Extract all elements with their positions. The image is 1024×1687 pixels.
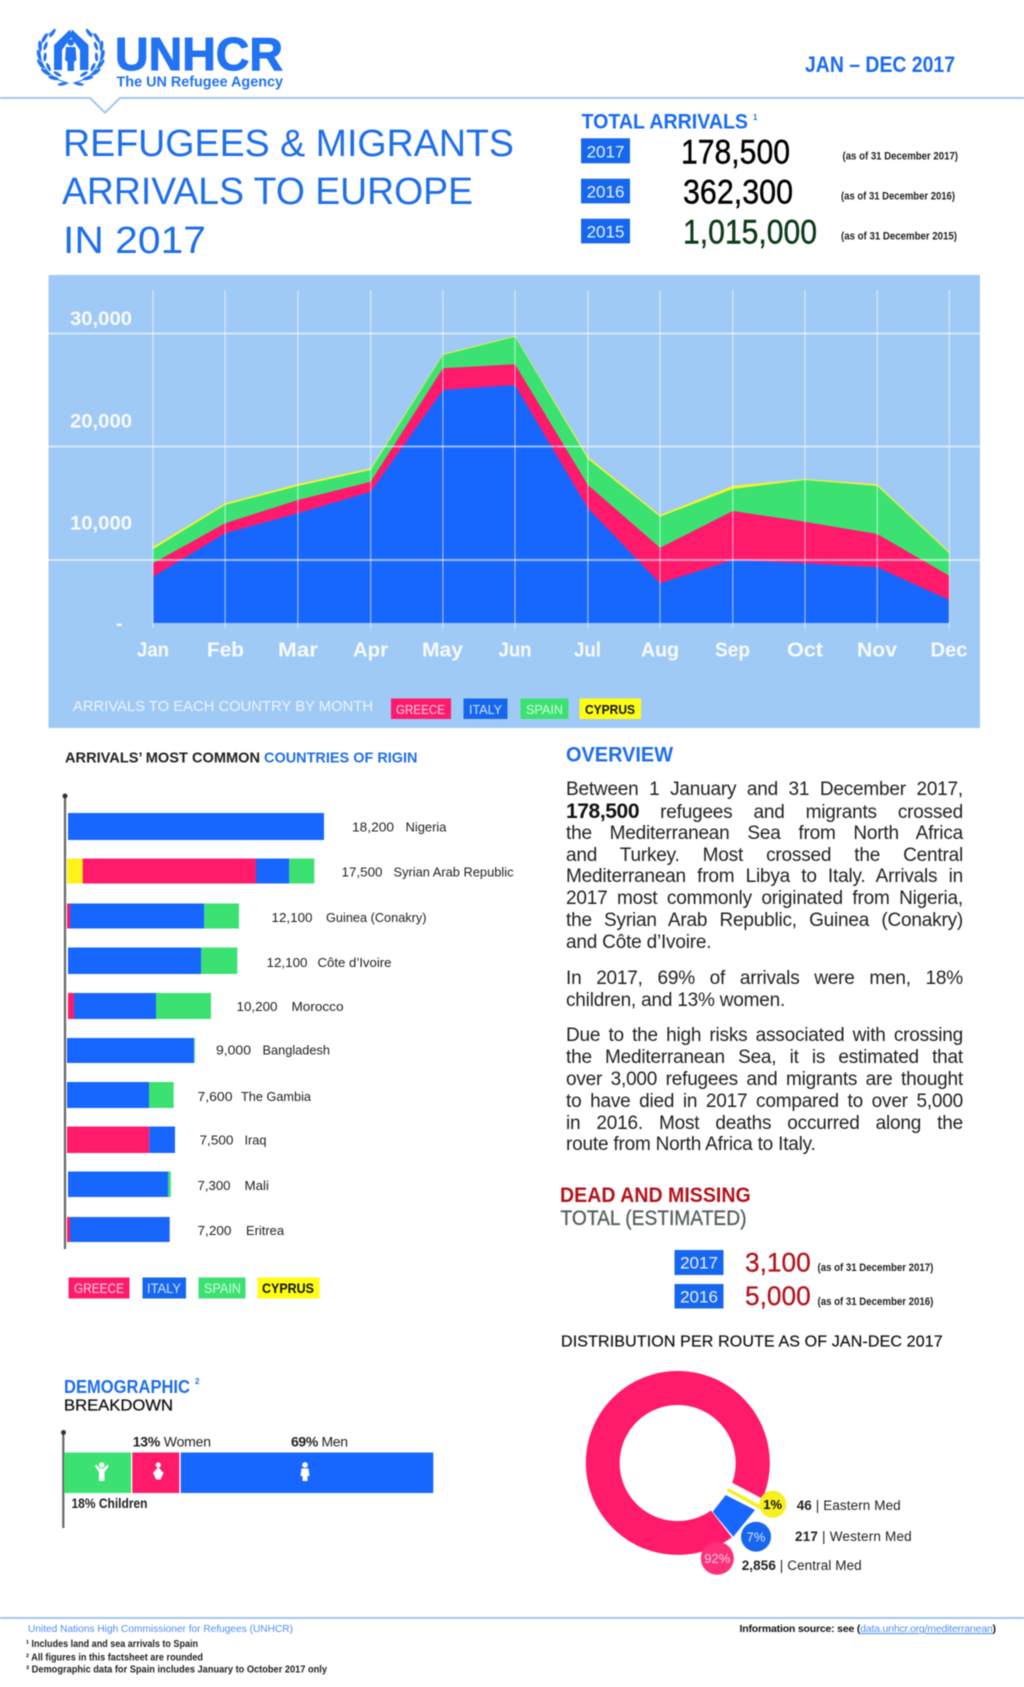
footer: source: Information source: see (data.unhcr.org/mediterranean) bbox=[740, 1623, 996, 1635]
row: 2016 bbox=[581, 173, 955, 211]
label: central med: 92% bbox=[704, 1551, 731, 1566]
bar: Syrian Arab Republic bbox=[67, 858, 514, 884]
y axis labels: - bbox=[116, 613, 122, 635]
heading: overview: OVERVIEW bbox=[566, 744, 673, 766]
segment: men: 69% Men bbox=[291, 1434, 348, 1450]
x axis labels: Apr bbox=[353, 640, 388, 662]
segment: central med bbox=[586, 1371, 770, 1555]
segment: children bbox=[64, 1452, 148, 1511]
bar: Morocco: 10,200 bbox=[236, 999, 278, 1014]
row: 2016 deaths: 5,000 bbox=[745, 1281, 811, 1311]
bar: Guinea (Conakry): 12,100 bbox=[272, 910, 312, 925]
bar: Nigeria: 18,200 bbox=[352, 820, 394, 834]
x axis labels: Jun bbox=[498, 640, 532, 662]
text block: overview: over 3,000 refugees and migrants are thought bbox=[566, 1069, 963, 1090]
y axis labels bbox=[70, 308, 132, 635]
bar: Iraq bbox=[67, 1126, 266, 1153]
heading: breakdown: BREAKDOWN bbox=[64, 1398, 173, 1414]
text block: overview: Due to the high risks associated with crossing bbox=[566, 1025, 963, 1046]
text block: overview: children, and 13% women. bbox=[566, 990, 785, 1011]
logo: UNHCR bbox=[36, 28, 284, 90]
heading: demographic: DEMOGRAPHIC bbox=[64, 1377, 190, 1397]
footnotes bbox=[26, 1638, 327, 1676]
text block: overview: Mediterranean from Libya to Italy. Arrivals in bbox=[566, 866, 963, 887]
bar: Morocco: Morocco bbox=[292, 999, 344, 1014]
icon: wreath and sheltering hands bbox=[36, 28, 106, 86]
bar chart: countries of origin bbox=[62, 794, 514, 1249]
x axis labels: Oct bbox=[787, 640, 823, 662]
text block: overview: in 2016. Most deaths occurred along the bbox=[566, 1113, 963, 1134]
bar: The Gambia: The Gambia bbox=[241, 1089, 312, 1104]
heading: dead and missing: DEAD AND MISSING bbox=[560, 1184, 751, 1207]
row: 2017 bbox=[581, 133, 958, 171]
footnotes: ³ Demographic data for Spain includes January to October 2017 only bbox=[26, 1664, 327, 1676]
y axis labels: 20,000 bbox=[70, 410, 132, 432]
text block: overview: In 2017, 69% of arrivals were men, 18% bbox=[566, 968, 963, 989]
bar: Bangladesh: Bangladesh bbox=[262, 1042, 330, 1058]
text block: overview: the Mediterranean Sea from North Africa bbox=[566, 823, 963, 844]
row: 2016 deaths: 2016 bbox=[680, 1288, 718, 1306]
text block: overview: to have died in 2017 compared to over 5,000 bbox=[566, 1091, 963, 1112]
area: cyprus bbox=[153, 336, 949, 623]
legend: chart: ITALY bbox=[469, 702, 502, 717]
segment: children: 18% Children bbox=[72, 1495, 148, 1511]
bar: Côte d'Ivoire: 12,100 bbox=[266, 955, 308, 970]
title bbox=[62, 123, 514, 262]
text block: overview bbox=[566, 779, 964, 1155]
bar: Nigeria: Nigeria bbox=[406, 820, 447, 834]
row: 2017 deaths: (as of 31 December 2017) bbox=[818, 1262, 934, 1274]
bar: Côte d'Ivoire: Côte d’Ivoire bbox=[318, 955, 392, 970]
x axis labels: Dec bbox=[930, 640, 968, 662]
legend: chart: CYPRUS bbox=[585, 702, 635, 717]
y axis labels: 10,000 bbox=[70, 512, 132, 534]
subheading: total estimated: TOTAL (ESTIMATED) bbox=[560, 1207, 746, 1230]
legend: chart bbox=[391, 698, 641, 719]
label: eastern med: 46 | Eastern Med bbox=[797, 1498, 901, 1513]
panel: dead and missing bbox=[560, 1184, 934, 1311]
label: western med: 217 | Western Med bbox=[795, 1529, 912, 1544]
row: 2016: 362,300 bbox=[683, 173, 793, 211]
x axis labels: Nov bbox=[857, 640, 898, 662]
text block: overview: the Mediterranean Sea, it is estimated that bbox=[566, 1047, 963, 1068]
panel: monthly arrivals chart bbox=[48, 275, 980, 728]
row: 2017 deaths: 2017 bbox=[680, 1254, 718, 1272]
row: 2016: (as of 31 December 2016) bbox=[841, 190, 955, 202]
bar: Iraq: 7,500 bbox=[200, 1132, 234, 1148]
bar: The Gambia: 7,600 bbox=[198, 1089, 232, 1104]
bar: The Gambia bbox=[67, 1082, 312, 1108]
icon: woman bbox=[153, 1462, 164, 1480]
text block: overview: route from North Africa to Italy. bbox=[566, 1134, 816, 1155]
row: 2016 deaths: (as of 31 December 2016) bbox=[818, 1296, 934, 1308]
row: 2017 deaths bbox=[674, 1248, 934, 1278]
x axis labels: Sep bbox=[715, 640, 750, 662]
x axis labels: Feb bbox=[207, 640, 244, 662]
panel: demographic breakdown bbox=[61, 1377, 433, 1528]
text block: overview: 2017 most commonly originated from Nigeria, bbox=[566, 888, 963, 909]
heading: countries of origin: COUNTRIES OF RIGIN bbox=[264, 750, 418, 766]
row: 2016 deaths bbox=[674, 1281, 934, 1311]
label: western med: 7% bbox=[747, 1530, 766, 1544]
bar: Mali bbox=[68, 1172, 269, 1197]
legend: countries chart: ITALY bbox=[147, 1280, 182, 1296]
text block: overview: Between 1 January and 31 December 2017, bbox=[566, 779, 963, 800]
label: western med bbox=[741, 1522, 912, 1552]
label: central med: 2,856 | Central Med bbox=[742, 1558, 862, 1573]
bar: Morocco bbox=[68, 993, 344, 1019]
logo wordmark: UNHCR bbox=[115, 28, 283, 80]
area: spain bbox=[153, 337, 949, 623]
heading: total arrivals: TOTAL ARRIVALS bbox=[582, 110, 748, 134]
heading: distribution per route: DISTRIBUTION PER ROUTE AS OF JAN-DEC 2017 bbox=[561, 1334, 943, 1350]
bar: Mali: Mali bbox=[244, 1178, 269, 1193]
x axis labels: Jan bbox=[137, 640, 169, 662]
heading: countries of origin bbox=[65, 750, 418, 766]
bar: Nigeria bbox=[68, 813, 447, 840]
footnotes: ¹ Includes land and sea arrivals to Spain bbox=[26, 1638, 198, 1650]
legend: countries chart: GREECE bbox=[74, 1280, 124, 1296]
bar: Eritrea: 7,200 bbox=[198, 1223, 232, 1238]
label: eastern med bbox=[759, 1491, 901, 1518]
x axis labels: Jul bbox=[574, 640, 601, 662]
text block: overview: and Côte d’Ivoire. bbox=[566, 932, 711, 953]
text block: overview: 178,500 refugees and migrants crossed bbox=[566, 800, 963, 823]
chart caption: ARRIVALS TO EACH COUNTRY BY MONTH bbox=[73, 698, 373, 715]
text block: overview: and Turkey. Most crossed the Central bbox=[566, 845, 963, 866]
row: 2015: 1,015,000 bbox=[683, 213, 817, 251]
row: 2016: 2016 bbox=[587, 182, 624, 202]
heading: countries of origin: ARRIVALS’ MOST COMMON bbox=[65, 750, 260, 766]
row: 2017: (as of 31 December 2017) bbox=[842, 150, 958, 162]
icon: child bbox=[95, 1462, 108, 1481]
bar: Côte d'Ivoire bbox=[68, 948, 392, 974]
legend: chart: GREECE bbox=[396, 702, 445, 717]
footnote marker: 2 bbox=[195, 1377, 200, 1386]
title: REFUGEES & MIGRANTS bbox=[63, 123, 514, 165]
label: central med bbox=[701, 1542, 862, 1575]
row: 2015: 2015 bbox=[587, 222, 624, 242]
bar: Guinea (Conakry): Guinea (Conakry) bbox=[326, 910, 426, 925]
x axis labels: Aug bbox=[641, 640, 679, 662]
header rule with notch bbox=[0, 98, 1024, 113]
bar: Iraq: Iraq bbox=[244, 1132, 266, 1148]
bar: Syrian Arab Republic: Syrian Arab Republic bbox=[394, 864, 514, 880]
legend: countries chart bbox=[68, 1278, 320, 1298]
panel: total arrivals bbox=[581, 110, 958, 251]
bar: Guinea (Conakry) bbox=[67, 904, 426, 928]
row: 2017: 2017 bbox=[587, 142, 624, 161]
legend: countries chart: CYPRUS bbox=[262, 1280, 314, 1296]
x axis labels: Mar bbox=[278, 640, 318, 662]
footer bbox=[0, 1618, 1024, 1676]
area: italy bbox=[153, 385, 949, 623]
footer: organisation: United Nations High Commissioner for Refugees (UNHCR) bbox=[28, 1623, 293, 1635]
bar: Bangladesh bbox=[67, 1038, 330, 1063]
segment: eastern med bbox=[727, 1488, 762, 1510]
label: eastern med: 1% bbox=[763, 1497, 783, 1512]
legend: chart: SPAIN bbox=[526, 702, 563, 717]
legend: countries chart: SPAIN bbox=[204, 1280, 241, 1296]
icon: man bbox=[300, 1462, 310, 1481]
date range: JAN – DEC 2017 bbox=[805, 52, 955, 77]
area: greece bbox=[153, 364, 949, 623]
text block: overview: the Syrian Arab Republic, Guinea (Conakry) bbox=[566, 910, 963, 931]
bar: Bangladesh: 9,000 bbox=[216, 1042, 251, 1058]
footnotes: ² All figures in this factsheet are rounded bbox=[26, 1652, 203, 1664]
row: 2017 deaths: 3,100 bbox=[745, 1248, 811, 1278]
bar: Eritrea: Eritrea bbox=[246, 1223, 285, 1238]
bar: Syrian Arab Republic: 17,500 bbox=[342, 864, 382, 880]
segment: men bbox=[181, 1434, 433, 1493]
y axis labels: 30,000 bbox=[70, 308, 132, 330]
x axis labels bbox=[137, 640, 968, 662]
row: 2015: (as of 31 December 2015) bbox=[841, 230, 957, 242]
bar: Eritrea bbox=[67, 1217, 285, 1242]
row: 2015 bbox=[581, 213, 957, 251]
footnote marker: 1 bbox=[753, 113, 758, 122]
logo tagline: The UN Refugee Agency bbox=[116, 74, 284, 90]
donut chart: routes bbox=[586, 1371, 912, 1575]
title: IN 2017 bbox=[63, 220, 206, 262]
segment: women bbox=[132, 1434, 211, 1493]
title: ARRIVALS TO EUROPE bbox=[62, 171, 473, 213]
segment: western med bbox=[713, 1495, 755, 1537]
bar: Mali: 7,300 bbox=[198, 1178, 230, 1193]
row: 2017: 178,500 bbox=[681, 133, 790, 171]
x axis labels: May bbox=[422, 640, 464, 662]
segment: women: 13% Women bbox=[133, 1434, 211, 1450]
